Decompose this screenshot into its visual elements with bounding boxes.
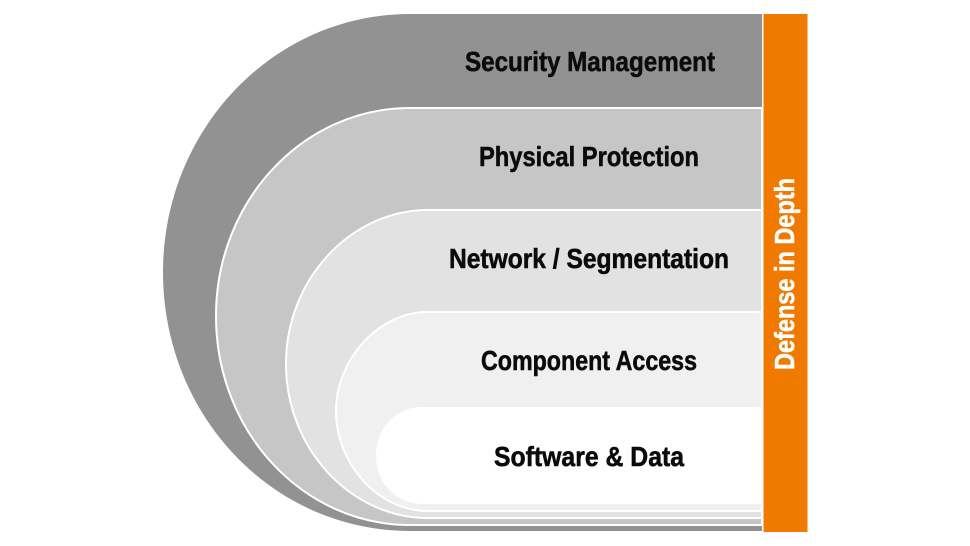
sidebar: defense in depth: [764, 14, 808, 532]
label: security management: Security Management: [465, 46, 715, 77]
label: physical protection: Physical Protection: [479, 141, 699, 172]
sidebar label: Defense in Depth: [769, 178, 800, 370]
layer: software and data: [376, 407, 762, 504]
label: network / segmentation: Network / Segmentation: [449, 243, 729, 274]
layer: component access: [336, 312, 762, 511]
label: software and data: Software & Data: [494, 441, 684, 472]
layer: network / segmentation: [286, 210, 762, 518]
label: component access: Component Access: [481, 345, 697, 376]
